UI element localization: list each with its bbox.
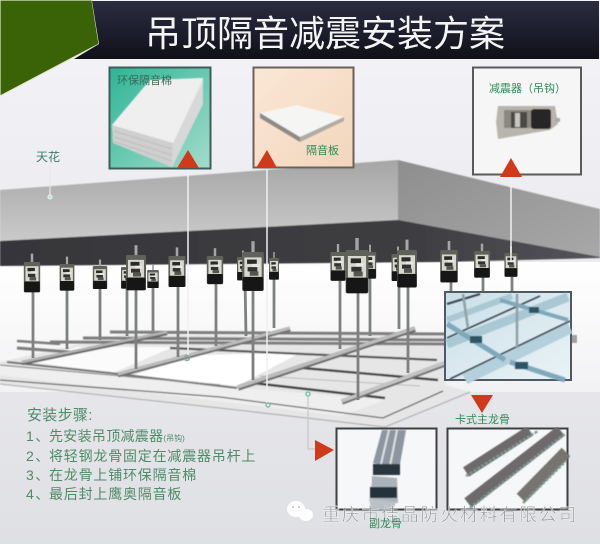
callout line: ceiling label	[48, 166, 52, 199]
step 2: 2、	[26, 448, 51, 464]
back cross rails	[17, 332, 445, 398]
hanger units	[24, 238, 518, 293]
arrow: right to sub keel	[315, 440, 334, 461]
label: 环保隔音棉	[117, 73, 172, 87]
step 4: 4、	[26, 486, 51, 502]
shock-absorbing hangers with rods	[24, 238, 518, 400]
rails in inset	[447, 294, 570, 380]
step 1: 先安装吊顶减震器	[49, 428, 163, 444]
panel: main keel photo	[448, 428, 568, 510]
stub rail right of inset	[570, 335, 577, 343]
white ceiling panels	[0, 347, 385, 416]
title: 吊顶隔音减震安装方案	[145, 13, 505, 54]
label: main keel: 卡式主龙骨	[455, 413, 510, 426]
title bar	[74, 1, 599, 59]
panel: inset grid detail	[445, 292, 571, 380]
rods	[33, 276, 512, 400]
steps heading: 安装步骤:	[27, 407, 93, 424]
step 4: 最后封上鹰奥隔音板	[49, 486, 182, 502]
watermark company name: 重庆市佳晶防火材料有限公司	[322, 505, 578, 525]
installation steps text	[26, 407, 256, 502]
step 3: 在龙骨上铺环保隔音棉	[49, 467, 197, 483]
panel: damper hook	[473, 68, 581, 174]
icon: sub keel	[369, 430, 406, 510]
arrow: up to insulation cotton	[177, 150, 199, 168]
label: ceiling: 天花	[36, 149, 60, 164]
label: sub keel: 副龙骨	[369, 517, 402, 530]
panel: insulation cotton	[110, 68, 210, 168]
panel: sub keel photo	[336, 428, 436, 510]
suspended ceiling grid	[0, 328, 470, 427]
room backdrop below ceiling	[0, 262, 600, 392]
step 1: 1、	[26, 428, 51, 444]
icon: board	[260, 105, 344, 142]
callout lines from product panels	[184, 168, 511, 407]
icon: damper photo	[496, 106, 560, 139]
panel: soundproof board	[254, 68, 354, 168]
plane edge lines	[0, 362, 470, 427]
corner green banner	[0, 0, 99, 96]
main rails	[22, 328, 450, 402]
arrow: up to soundproof board	[256, 150, 277, 168]
icon: cotton stack	[112, 78, 203, 167]
ceiling slab	[0, 160, 600, 266]
step 1: (吊钩)	[163, 433, 185, 443]
callout line to sub keel	[308, 396, 318, 449]
icon: wechat watermark	[287, 501, 313, 521]
step 2: 将轻钢龙骨固定在减震器吊杆上	[49, 448, 256, 464]
step 3: 3、	[26, 467, 51, 483]
icon: keel strips	[466, 431, 566, 508]
label: 隔音板	[306, 143, 339, 157]
label: 减震器（吊钩）	[489, 81, 566, 95]
arrow: up to damper	[500, 158, 522, 177]
arrow: down to main keel	[471, 395, 493, 413]
